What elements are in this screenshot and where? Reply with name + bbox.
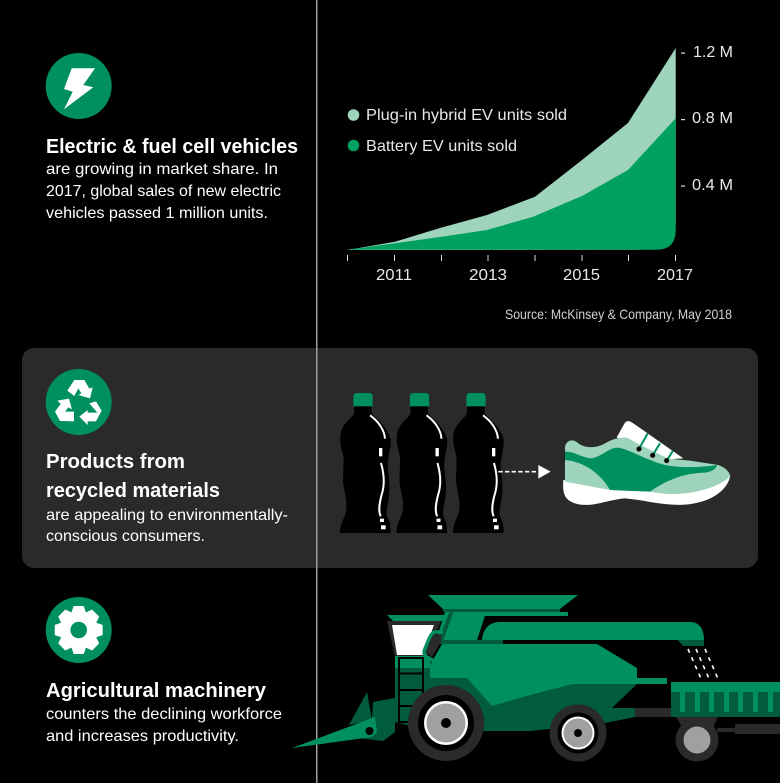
grain stream: [688, 649, 719, 681]
y axis labels: 0.8 M: [692, 110, 733, 127]
legend: Battery EV units sold: [366, 138, 517, 155]
text block: agricultural machinery: counters the declining workforce: [46, 706, 282, 723]
heading: recycled materials: Products from: [46, 451, 185, 473]
window gap: [477, 616, 530, 640]
text block: agricultural machinery: and increases productivity.: [46, 728, 239, 745]
arrow: bottles to shoe: [498, 465, 551, 479]
slanted pillar: [438, 612, 454, 641]
x axis ticks: [348, 255, 676, 261]
text block: electric vehicles: 2017, global sales of new electric: [46, 183, 281, 200]
illustration: bottles: [340, 393, 504, 533]
legend: [348, 107, 567, 155]
heading: recycled materials: [46, 451, 220, 502]
text block: electric vehicles: are growing in market share. In: [46, 161, 278, 178]
text block: agricultural machinery: [46, 706, 282, 745]
y axis labels: 1.2 M: [693, 44, 733, 61]
y axis labels: 0.4 M: [692, 177, 733, 194]
plug-in hybrid area: [347, 48, 676, 250]
icon: lightning bolt: [46, 53, 112, 119]
hopper: [428, 595, 578, 609]
text block: recycled materials: are appealing to environmentally-: [46, 507, 288, 524]
icon: gear: [46, 597, 112, 663]
x axis labels: [376, 267, 693, 284]
x axis labels: 2015: [563, 267, 600, 284]
handrail: [424, 632, 443, 661]
heading: recycled materials: recycled materials: [46, 480, 220, 502]
source note: Source: McKinsey & Company, May 2018: [505, 306, 732, 322]
header fin and body: [349, 692, 372, 725]
x axis labels: 2011: [376, 267, 412, 284]
handrail inner: [427, 634, 441, 657]
heading: agricultural machinery: Agricultural machinery: [46, 680, 267, 702]
heading: electric vehicles: Electric & fuel cell vehicles: [46, 136, 298, 158]
front wheel: [408, 685, 484, 761]
lower dark body: [395, 657, 637, 731]
upper body panel: [436, 612, 486, 640]
trailer wheel: [676, 718, 718, 762]
icon: recycling: [46, 369, 112, 435]
rear wheel: [550, 704, 606, 762]
main body: [430, 644, 667, 706]
header spear: [292, 717, 377, 748]
trailer hitch: [635, 708, 671, 717]
y axis labels: [681, 44, 733, 194]
text block: electric vehicles: vehicles passed 1 million units.: [46, 205, 268, 222]
legend: Plug-in hybrid EV units sold: [366, 107, 567, 124]
illustration: shoe: [563, 421, 730, 505]
ladder: [399, 658, 423, 722]
cab: [387, 615, 445, 621]
trailer: [671, 682, 780, 717]
x axis labels: 2017: [657, 267, 693, 284]
text block: recycled materials: conscious consumers.: [46, 528, 205, 545]
illustration: combine harvester: [292, 595, 780, 762]
text block: electric vehicles: [46, 161, 281, 222]
x axis labels: 2013: [469, 267, 507, 284]
battery EV area: [347, 118, 676, 250]
text block: recycled materials: [46, 507, 288, 545]
panel: recycled materials background: [22, 348, 758, 568]
auger arm: [482, 622, 704, 640]
chart: EV units sold area chart: [347, 44, 733, 284]
